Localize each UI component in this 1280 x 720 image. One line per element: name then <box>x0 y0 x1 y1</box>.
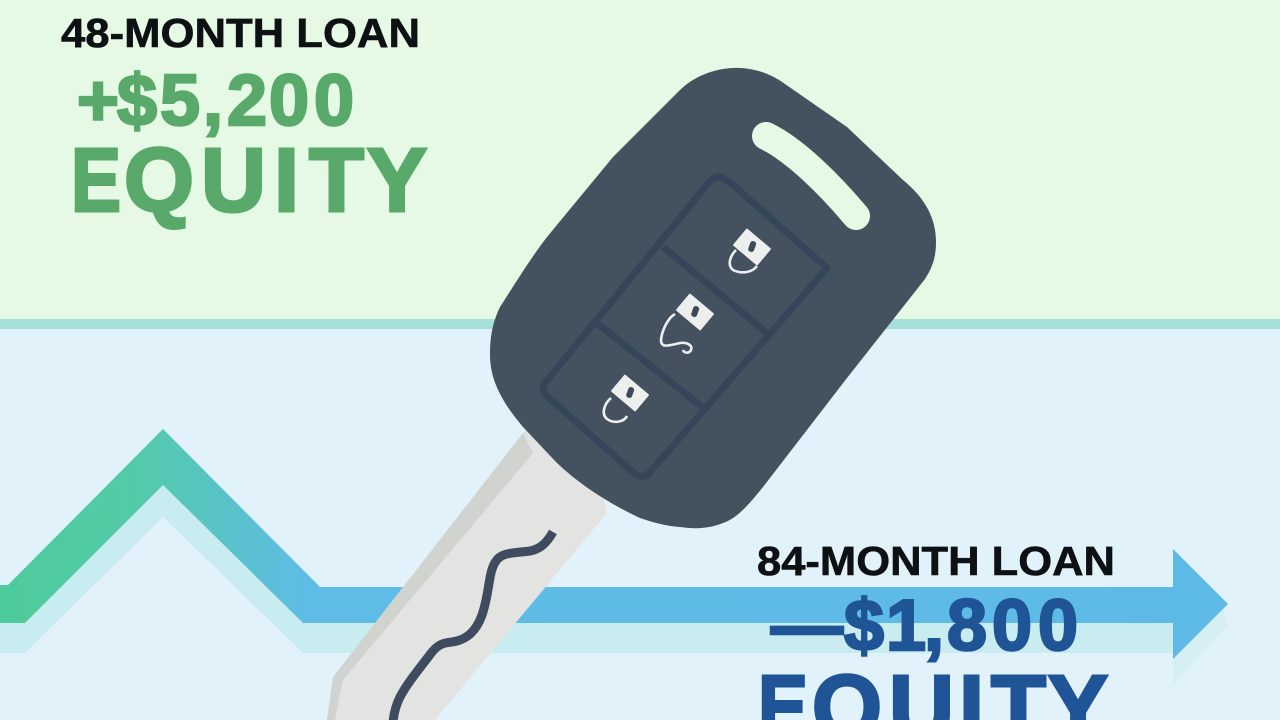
button divider top <box>663 247 767 333</box>
key blade <box>327 425 607 720</box>
icon: middle lock <box>661 293 714 353</box>
icon: car key <box>327 68 936 720</box>
lock keyhole <box>691 306 700 317</box>
lock body <box>733 228 771 266</box>
heading: 48-month loan: 48-MONTH LOAN <box>61 10 420 56</box>
lock shackle <box>604 398 627 422</box>
lock shackle <box>730 250 757 272</box>
label: equity green: E <box>71 131 121 231</box>
blade bevel <box>327 433 533 720</box>
lock body <box>611 374 649 412</box>
key ring slot <box>766 136 856 216</box>
arrowhead shadow <box>1173 609 1228 685</box>
lock body <box>676 293 714 331</box>
icon: top lock <box>730 228 771 272</box>
chart: equity trend line with arrow <box>0 429 1228 685</box>
value: +$5,200: +$5,200 <box>77 61 354 141</box>
blade groove <box>393 532 553 720</box>
panel: blue lower background <box>0 329 1280 720</box>
lock keyhole <box>626 387 634 398</box>
label: equity green: QUITY <box>124 131 427 231</box>
button panel outline <box>543 177 827 476</box>
lock shackle <box>661 314 691 353</box>
trend line shadow <box>0 485 1173 653</box>
button divider bottom <box>597 323 702 407</box>
panel divider band <box>0 319 1280 329</box>
heading: 84-month loan: 84-MONTH LOAN <box>757 538 1115 584</box>
trend line arrow <box>0 429 1228 659</box>
panel: green upper background <box>0 0 1280 320</box>
text block: 84-month loan <box>757 538 1115 720</box>
lock keyhole <box>748 241 756 252</box>
value: -$1,800: —$1,800 <box>771 586 1078 666</box>
text block: 48-month loan <box>61 10 427 231</box>
icon: bottom lock <box>604 374 649 422</box>
blade face <box>327 425 607 720</box>
key fob body <box>490 68 936 528</box>
